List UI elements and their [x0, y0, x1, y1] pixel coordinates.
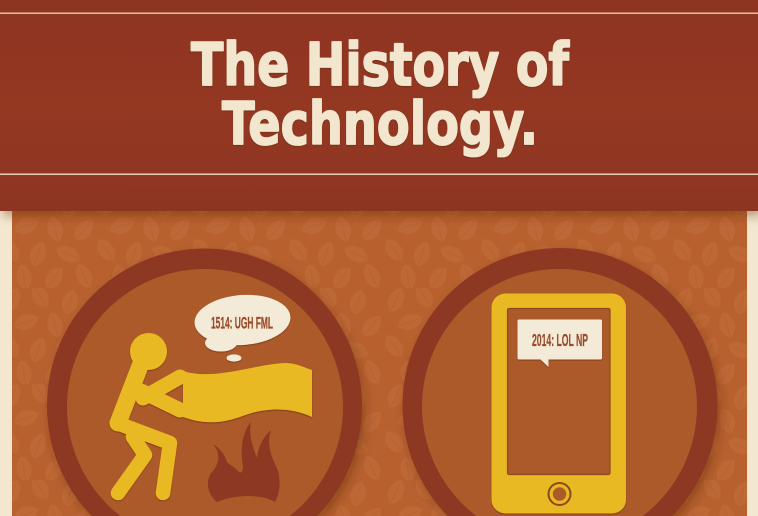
home button — [548, 483, 570, 505]
badge ring — [47, 248, 362, 516]
right badge: 2014 — [402, 248, 718, 516]
phone screen — [508, 308, 610, 474]
right badge: 2014: 2014: LOL NP — [532, 330, 588, 350]
left badge: 1514: 1514: UGH FML — [211, 314, 273, 332]
thought bubble — [193, 292, 292, 362]
speech bubble — [518, 320, 602, 367]
header banner — [0, 0, 758, 211]
title: Technology. — [222, 89, 538, 158]
title: The History of — [191, 30, 570, 99]
left badge: 1514 — [47, 248, 362, 516]
icon: smartphone — [492, 294, 626, 514]
phone body — [492, 294, 626, 514]
icon: flame — [208, 422, 280, 502]
badge inner disc — [67, 269, 343, 516]
icon: stick figure with cloth — [117, 333, 312, 493]
title — [191, 30, 570, 158]
leaf pattern panel — [12, 205, 747, 516]
badge inner disc — [422, 269, 697, 516]
badge ring — [402, 248, 718, 516]
